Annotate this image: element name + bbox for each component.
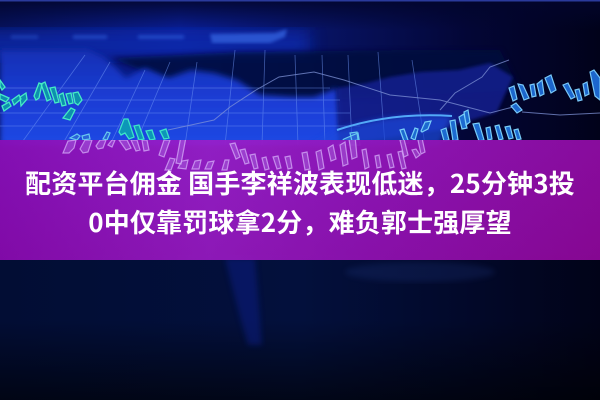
title text [25, 164, 575, 240]
globe arc glow [310, 115, 452, 145]
faint blurred header ticks [11, 29, 287, 43]
title text: 0中仅靠罚球拿2分，难负郭士强厚望 [88, 203, 512, 240]
blue mountain chart area [0, 50, 340, 145]
candlesticks: cyan cluster center-right [400, 110, 521, 144]
lower dark section [0, 255, 600, 400]
candlesticks seen through the band [62, 140, 426, 171]
candlesticks: cyan cluster far right [509, 70, 600, 113]
title text: 配资平台佣金 国手李祥波表现低迷，25分钟3投 [25, 164, 575, 201]
trend lines [168, 60, 600, 130]
grid lines [0, 50, 425, 145]
candlesticks: green cluster center [119, 119, 169, 140]
dim mountains right [337, 63, 513, 145]
vertical glow below band [225, 258, 262, 345]
top-left blue haze [0, 30, 310, 60]
dotted sphere reflection [345, 262, 495, 282]
purple title band [0, 140, 600, 260]
dark shadow band behind mountains [110, 50, 520, 100]
candlesticks: green cluster left [0, 80, 82, 120]
candlesticks: pale blue cluster [70, 132, 360, 145]
